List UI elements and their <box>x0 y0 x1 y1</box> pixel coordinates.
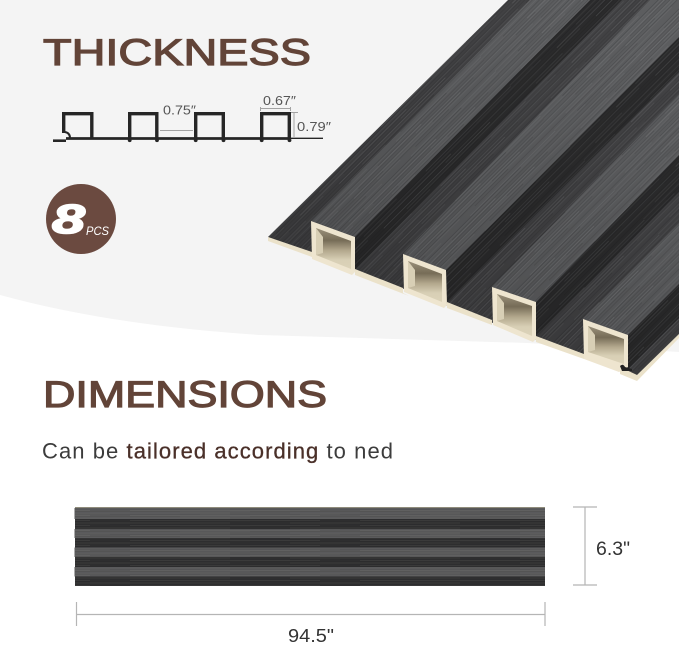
badge number: 8 <box>52 196 85 242</box>
profile cross-section diagram <box>53 94 332 142</box>
panel front edge strip <box>268 237 679 381</box>
dimension: length <box>76 602 545 646</box>
dimension: height <box>573 507 630 585</box>
rib side walls <box>355 0 679 369</box>
label: 0.67: 0.67″ <box>263 94 297 108</box>
rib stripes <box>74 508 545 576</box>
wood grain and depth shading <box>268 0 679 378</box>
heading: DIMENSIONS: DIMENSIONS <box>43 374 327 415</box>
background: light grey upper area <box>0 0 679 352</box>
rib top faces <box>311 0 679 335</box>
label: 0.79: 0.79″ <box>297 120 332 134</box>
subheading: tailoring note: Can be tailored according to ned <box>42 438 393 464</box>
badge: 8 pcs <box>46 184 116 254</box>
rib opening 2 <box>403 254 447 308</box>
panel profile outline <box>53 114 323 141</box>
label: 0.75: 0.75″ <box>163 104 197 118</box>
rib opening 4 <box>583 319 632 372</box>
joint dots <box>128 138 291 142</box>
product: wall panel perspective view <box>268 0 679 381</box>
measure lines <box>160 107 298 137</box>
height value: 6.3" <box>596 538 630 560</box>
badge unit: PCS <box>86 226 109 238</box>
heading: THICKNESS: THICKNESS <box>43 31 311 73</box>
panel base surface <box>268 0 679 378</box>
rib opening 3 <box>492 287 536 342</box>
rib opening 1 <box>311 221 355 275</box>
product: front view of panel <box>74 507 545 586</box>
length value: 94.5" <box>288 626 334 646</box>
